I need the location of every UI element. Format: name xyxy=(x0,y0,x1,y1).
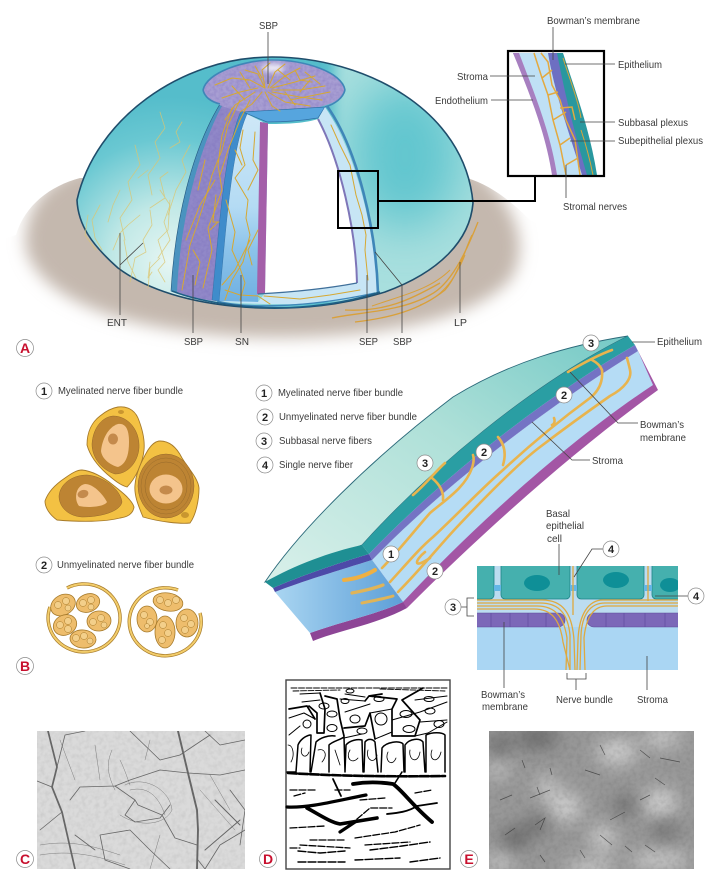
label: Basal epithelial cell: cell xyxy=(547,534,562,545)
panel letter C: C xyxy=(20,851,30,867)
dome shadow xyxy=(25,165,520,337)
label: SEP: SEP xyxy=(359,337,378,348)
unmyelinated right sheath xyxy=(129,588,201,656)
panel letter E: E xyxy=(464,851,474,867)
myelinated left cell xyxy=(45,470,134,521)
detail layers xyxy=(477,566,678,670)
stroma side xyxy=(372,351,653,602)
label: Nerve bundle: Nerve bundle xyxy=(556,695,613,706)
panel letter D xyxy=(260,850,276,868)
inset: corneal layers xyxy=(508,51,604,176)
front endothelium xyxy=(310,602,407,641)
panel letter C xyxy=(16,850,34,868)
dendritic marks xyxy=(500,745,680,862)
cell junctions xyxy=(494,585,652,591)
legend: Single nerve fiber xyxy=(279,460,354,471)
legend: 1 xyxy=(261,388,267,400)
top cut face xyxy=(243,107,325,122)
left blue band xyxy=(171,104,226,293)
heading: myelinated bundle: 1 xyxy=(41,386,47,398)
label: Subepithelial plexus: Subepithelial plexus xyxy=(618,136,703,147)
connector to inset xyxy=(378,176,535,201)
callouts on section: 3 xyxy=(588,338,594,350)
panel B: nerve fiber bundles xyxy=(16,383,201,674)
bowman side xyxy=(369,345,638,560)
legend: 4 xyxy=(262,460,269,472)
heading: myelinated bundle xyxy=(36,383,183,399)
callouts on section: 2 xyxy=(481,447,487,459)
myelinated right cell xyxy=(135,441,199,523)
legend: Myelinated nerve fiber bundle xyxy=(278,388,403,399)
panel E: confocal micrograph xyxy=(460,729,694,875)
callouts on detail: 4 xyxy=(693,591,700,603)
right wall outer band xyxy=(327,106,378,293)
callouts on detail xyxy=(445,541,704,615)
label: Stromal nerves: Stromal nerves xyxy=(563,202,627,213)
floor edge xyxy=(258,283,357,294)
central button xyxy=(203,60,345,112)
legend: 3 xyxy=(261,436,267,448)
label: Bowman's membrane section: Bowman’s xyxy=(640,420,684,431)
label: Bowman's membrane detail: membrane xyxy=(482,702,528,713)
dome outline xyxy=(77,57,473,308)
label: Subbasal plexus: Subbasal plexus xyxy=(618,118,688,129)
detail: subbasal nerve cross-section xyxy=(445,509,704,713)
subbasal plexus nerves at apex xyxy=(215,63,330,120)
legend xyxy=(256,385,417,473)
right wall inner edge xyxy=(318,119,357,283)
panel letter A xyxy=(16,340,34,356)
basal lamina line xyxy=(288,773,445,776)
epithelial cells xyxy=(477,566,678,600)
callouts on detail: 3 xyxy=(450,602,456,614)
nerves in subbasal strip xyxy=(182,100,250,290)
legend: Subbasal nerve fibers xyxy=(279,436,372,447)
legend: 2 xyxy=(262,412,268,424)
dome label lines xyxy=(120,32,460,333)
long nerves in stroma xyxy=(382,350,630,592)
label: SBP right: SBP xyxy=(393,337,412,348)
epithelium side xyxy=(362,336,635,554)
panel A: dome diagram of corneal nerves xyxy=(16,16,703,356)
stromal nerve branches xyxy=(287,772,437,832)
dome body xyxy=(77,57,473,308)
axon clusters xyxy=(47,590,198,649)
label: Basal epithelial cell: Basal xyxy=(546,509,570,520)
nuclei xyxy=(524,572,680,592)
stroma panel xyxy=(217,112,263,302)
micrograph background xyxy=(486,729,694,875)
label: SBP: SBP xyxy=(184,337,203,348)
right wall xyxy=(318,107,377,293)
label: Bowman's membrane section: membrane xyxy=(640,433,686,444)
heading: unmyelinated bundle: 2 xyxy=(41,560,47,572)
nerves in stroma xyxy=(222,130,360,304)
label: Endothelium: Endothelium xyxy=(435,96,488,107)
panel letter B xyxy=(16,658,34,674)
panel letter D: D xyxy=(263,851,273,867)
micrograph background xyxy=(37,731,245,869)
heading: unmyelinated bundle xyxy=(36,557,194,573)
opening xyxy=(265,119,357,293)
lower limbus band xyxy=(172,291,380,308)
nerve in right wall xyxy=(331,125,368,280)
highlight box on dome xyxy=(338,171,378,228)
stromal keratocyte strokes xyxy=(290,790,440,862)
top surface xyxy=(265,336,628,582)
basal columnar cells xyxy=(287,733,445,772)
label: ENT: ENT xyxy=(107,318,127,329)
limbus inner band xyxy=(217,293,375,306)
detail label lines xyxy=(461,544,688,690)
front stroma xyxy=(275,560,403,633)
callouts on section xyxy=(383,335,599,579)
callouts on section: 3 xyxy=(422,458,428,470)
label: SN: SN xyxy=(235,337,249,348)
heading: unmyelinated bundle: Unmyelinated nerve fiber bundle xyxy=(57,560,194,571)
limbal nerves xyxy=(332,222,478,322)
myelinated top cell xyxy=(87,407,144,487)
callouts on section: 1 xyxy=(388,549,394,561)
callouts on section: 2 xyxy=(561,390,567,402)
label: Bowman's membrane detail: Bowman’s xyxy=(481,690,525,701)
panel letter E xyxy=(460,850,478,868)
heading: myelinated bundle: Myelinated nerve fiber bundle xyxy=(58,386,183,397)
front epithelium xyxy=(265,545,369,588)
endothelium strip xyxy=(257,122,268,294)
upper epithelial cells xyxy=(289,688,447,739)
label: Stroma detail: Stroma xyxy=(637,695,668,706)
corneal section block diagram xyxy=(265,335,702,641)
inset label lines xyxy=(490,27,615,198)
endothelium side xyxy=(372,351,658,608)
label: Stroma section: Stroma xyxy=(592,456,623,467)
label: Stroma: Stroma xyxy=(457,72,488,83)
label: Basal epithelial cell: epithelial xyxy=(546,521,584,532)
nerve fibers xyxy=(477,566,678,670)
section label lines xyxy=(532,342,655,460)
panel D: histological drawing xyxy=(260,680,450,869)
drawing frame xyxy=(286,680,450,869)
endothelial nerves on dome surface xyxy=(85,112,190,288)
dome right side shading xyxy=(328,64,472,303)
nerve ends on front face xyxy=(344,570,393,603)
label: Epithelium section: Epithelium xyxy=(657,337,702,348)
front bowman xyxy=(273,554,372,592)
label: LP: LP xyxy=(454,318,467,329)
micrograph nerves xyxy=(37,731,245,869)
floor cut xyxy=(217,283,375,304)
panel letter B: B xyxy=(20,658,30,674)
unmyelinated left sheath xyxy=(48,584,120,652)
purple subbasal strip xyxy=(177,104,243,301)
legend: Unmyelinated nerve fiber bundle xyxy=(279,412,417,423)
label: SBP top: SBP xyxy=(259,21,278,32)
label: Epithelium: Epithelium xyxy=(618,60,662,71)
label: Bowman's membrane: Bowman’s membrane xyxy=(547,16,640,27)
blue band along panel xyxy=(212,111,247,301)
bowman layer xyxy=(470,613,690,627)
panel letter A: A xyxy=(20,340,30,356)
callouts on section: 2 xyxy=(432,566,438,578)
callouts on detail: 4 xyxy=(608,544,615,556)
panel C: nerve micrograph xyxy=(16,731,245,869)
